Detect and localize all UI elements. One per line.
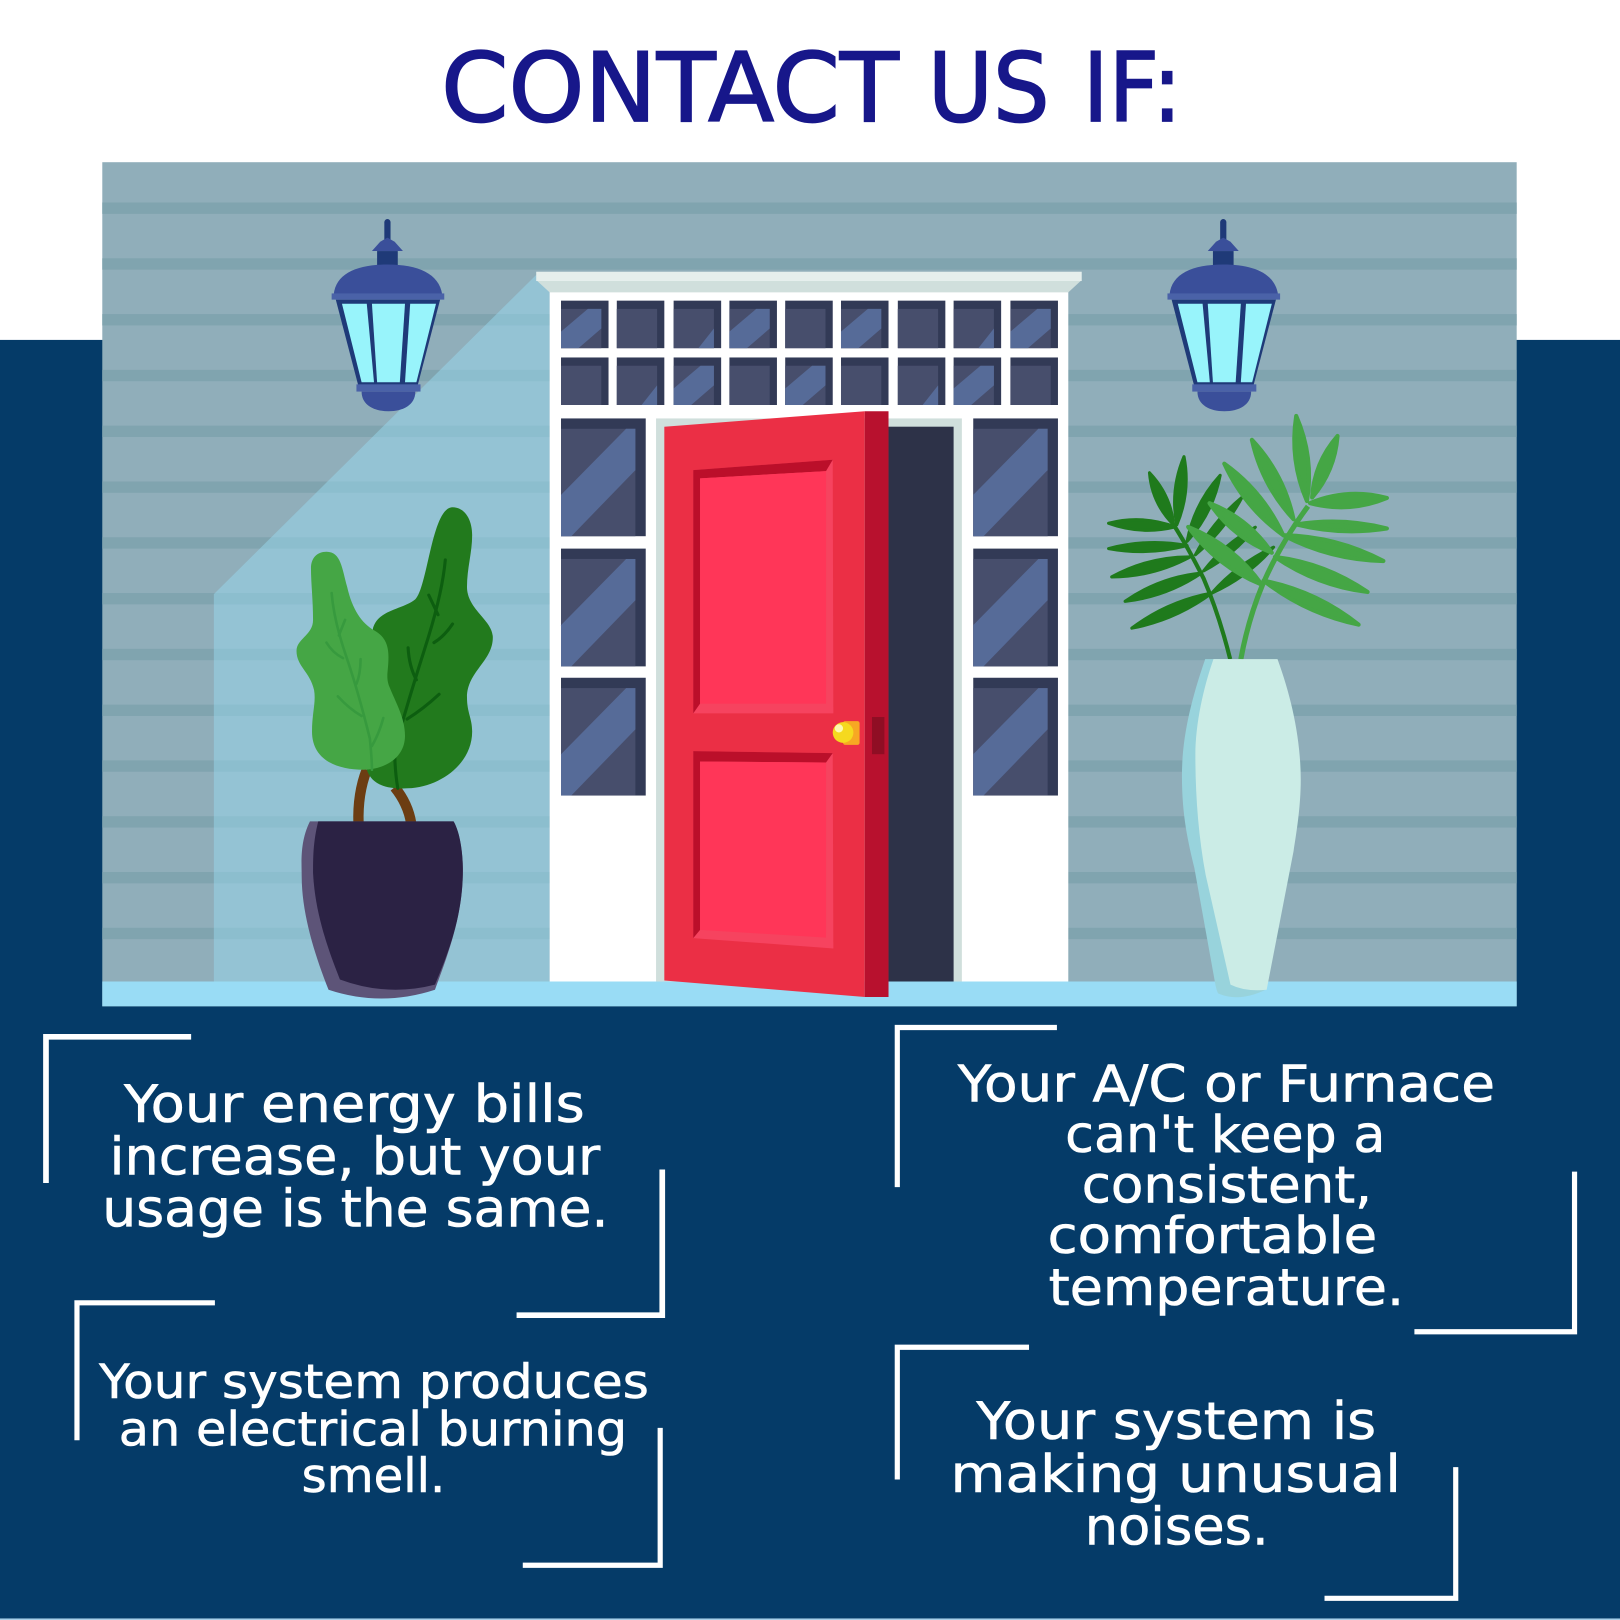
title: IF: <box>1083 34 1182 144</box>
callout text <box>951 1392 1401 1558</box>
title <box>441 34 1182 144</box>
navy background panel <box>0 340 1620 1620</box>
callout text: increase, but your <box>110 1128 601 1188</box>
right palm in white vase <box>1109 416 1387 997</box>
bracket corners <box>897 1347 1456 1598</box>
callout: burning smell <box>77 1303 660 1565</box>
dark doorway opening <box>889 427 954 982</box>
callout text: usage is the same. <box>102 1179 609 1239</box>
dark leaf <box>367 507 493 788</box>
cornice <box>536 272 1082 292</box>
callout text: noises. <box>1085 1498 1269 1558</box>
callout: unusual noises <box>897 1347 1456 1598</box>
callout text: Your A/C or Furnace <box>957 1054 1495 1113</box>
light leaf <box>297 552 405 770</box>
callout text: Your system produces <box>98 1355 649 1410</box>
light beam from lantern <box>214 275 550 982</box>
callout text: consistent, <box>1082 1156 1372 1215</box>
plant stems <box>358 770 411 823</box>
red open door <box>664 411 889 997</box>
title: CONTACT <box>441 34 900 144</box>
vase <box>1182 659 1301 997</box>
door surround with windows <box>536 272 1082 982</box>
callout text: comfortable <box>1048 1206 1377 1265</box>
icon: right wall lantern <box>1167 219 1280 411</box>
bracket corners <box>897 1027 1575 1332</box>
right side windows <box>973 418 1058 796</box>
left side windows <box>561 418 646 796</box>
bottom edge line <box>0 1618 1620 1620</box>
icon: left wall lantern <box>332 219 444 411</box>
callout text: Your energy bills <box>123 1075 585 1135</box>
callout: energy bills <box>46 1037 662 1315</box>
callout text: an electrical burning <box>119 1402 627 1457</box>
bracket corners <box>77 1303 660 1565</box>
callout text: Your system is <box>975 1392 1376 1452</box>
transom windows <box>561 301 1058 405</box>
door knob <box>833 721 860 745</box>
illustration: house front entrance <box>102 162 1517 1006</box>
upper door panel <box>693 460 833 713</box>
callout: A/C or furnace <box>897 1027 1575 1332</box>
title: US <box>928 34 1050 144</box>
left potted plant <box>297 507 493 999</box>
bracket corners <box>46 1037 662 1315</box>
door jamb <box>656 418 962 982</box>
callout text: can't keep a <box>1065 1105 1385 1164</box>
lower door panel <box>693 751 833 948</box>
callout text: making unusual <box>951 1445 1401 1505</box>
callout text <box>98 1355 649 1504</box>
white page background <box>0 0 1620 341</box>
callout text: smell. <box>302 1449 445 1504</box>
dark plant pot <box>302 821 463 999</box>
door latch <box>872 717 884 754</box>
callout text <box>957 1054 1495 1317</box>
callout text <box>102 1075 609 1239</box>
wall siding <box>102 162 1517 1006</box>
dark palm frond <box>1109 457 1274 659</box>
callout text: temperature. <box>1049 1258 1404 1317</box>
light palm frond <box>1188 416 1387 659</box>
floor strip <box>102 982 1517 1006</box>
white frame <box>550 289 1068 982</box>
